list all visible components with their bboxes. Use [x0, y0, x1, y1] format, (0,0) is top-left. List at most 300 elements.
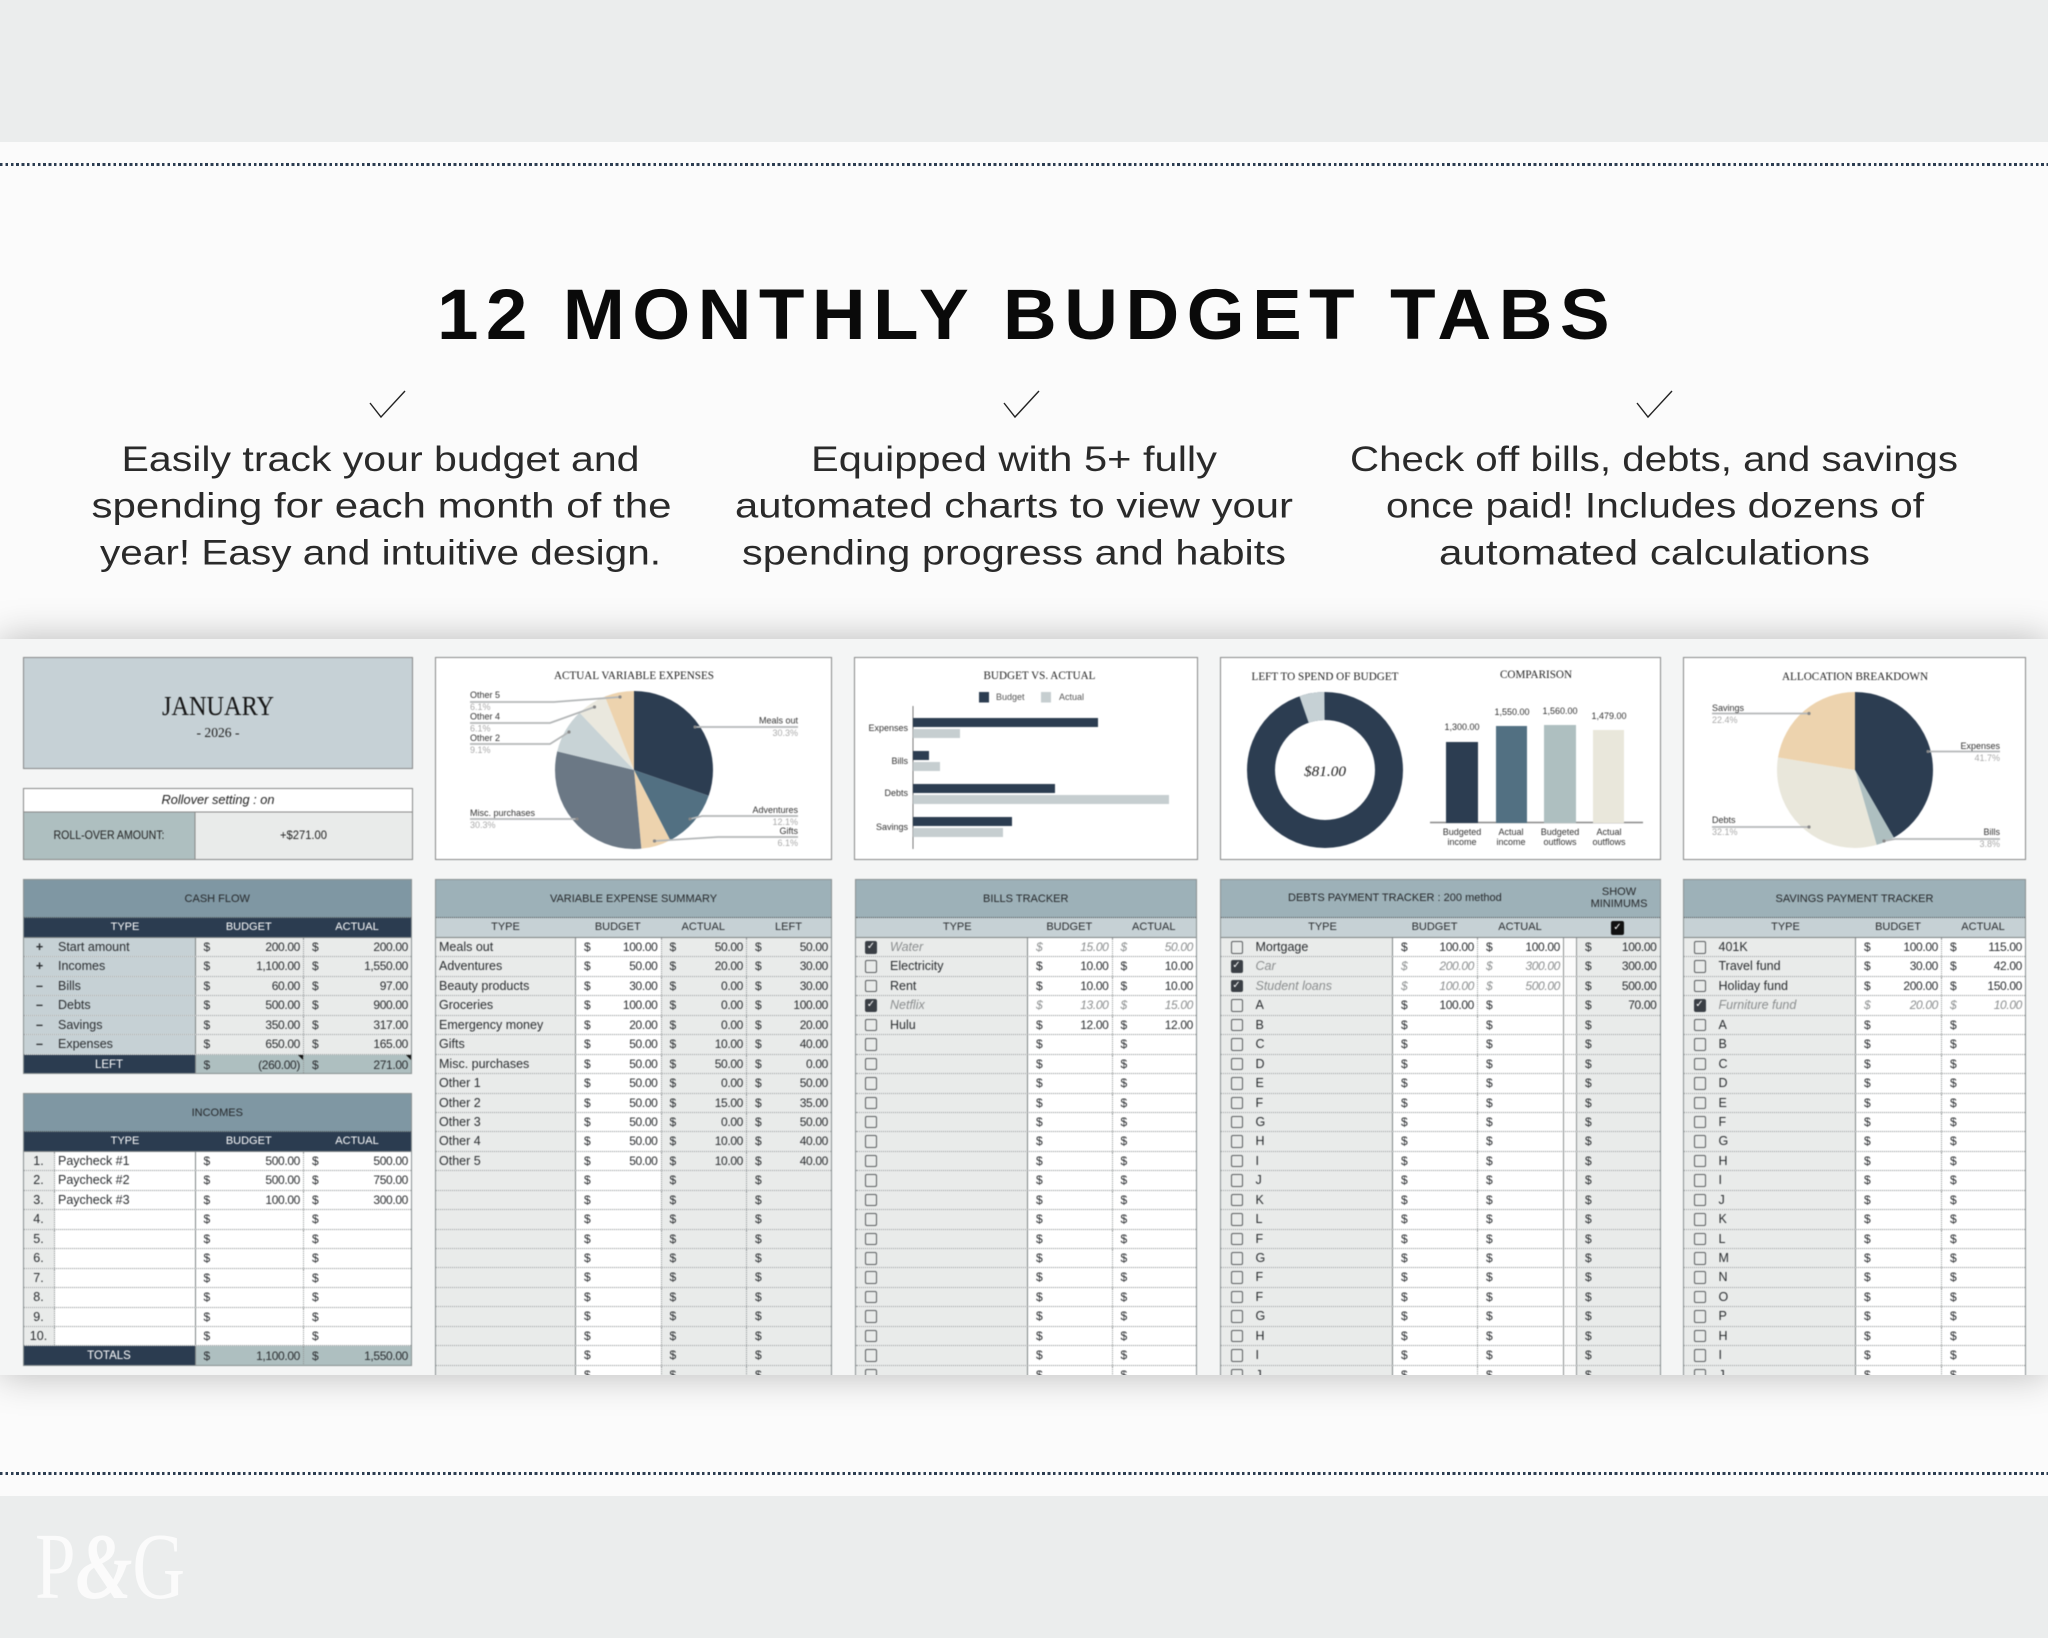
variable expense rows: 100.00	[623, 998, 658, 1012]
variable expense rows: 0.00	[806, 1057, 828, 1071]
incomes rows: $	[312, 1173, 319, 1187]
chart: budget vs actual bars: Debts	[884, 788, 908, 798]
debts rows: 100.00	[1525, 940, 1560, 954]
variable expense rows: $	[755, 1057, 762, 1071]
variable expense rows: $	[755, 1076, 762, 1090]
incomes rows: 2.	[33, 1173, 44, 1187]
variable expense rows: $	[670, 1309, 676, 1323]
debts rows: G	[1256, 1115, 1265, 1129]
debts rows: $	[1486, 1037, 1493, 1051]
cash flow rows: $	[204, 998, 210, 1012]
bills rows: 10.00	[1080, 959, 1108, 973]
debts rows: $	[1401, 1018, 1408, 1032]
savings rows: $	[1864, 1290, 1871, 1304]
savings rows: $	[1950, 1193, 1957, 1207]
variable expense rows: $	[670, 940, 676, 954]
savings rows: N	[1718, 1270, 1728, 1284]
chart: actual variable expenses pie: Adventures	[752, 805, 798, 815]
debts rows: H	[1256, 1329, 1265, 1343]
bills rows: $	[1036, 1329, 1043, 1343]
savings rows: $	[1864, 979, 1871, 993]
chart: left to spend donut and comparison bars: income	[1496, 837, 1526, 847]
savings rows: O	[1718, 1290, 1728, 1304]
savings rows: $	[1950, 1076, 1957, 1090]
variable expense rows: $	[670, 1154, 676, 1168]
variable expense rows: $	[584, 1251, 591, 1265]
savings rows: 30.00	[1910, 959, 1938, 973]
savings rows: $	[1864, 1115, 1871, 1129]
cash flow rows: $	[312, 979, 319, 993]
chart: budget vs actual bars	[853, 656, 1199, 861]
variable expense rows: $	[755, 998, 762, 1012]
bills rows: $	[1120, 1193, 1127, 1207]
variable expense rows: 0.00	[721, 979, 743, 993]
debts rows: $	[1486, 1018, 1493, 1032]
incomes rows: 9.	[33, 1310, 44, 1324]
savings rows: $	[1864, 1154, 1871, 1168]
variable expense rows: 50.00	[629, 1115, 658, 1129]
incomes rows: 500.00	[373, 1154, 408, 1168]
feature 2: check and description: spending progress and habits	[742, 534, 1286, 572]
feature 2: check and description: Equipped with 5+ fully	[811, 440, 1218, 479]
savings column heads: TYPE	[1771, 921, 1800, 933]
debts rows: $	[1401, 1309, 1408, 1323]
variable expense rows: 0.00	[721, 1018, 743, 1032]
chart: left to spend donut and comparison bars: Actual	[1498, 827, 1524, 837]
bills rows: $	[1120, 1134, 1127, 1148]
top band	[0, 0, 2048, 142]
chart: left to spend donut and comparison bars: income	[1447, 837, 1477, 847]
incomes rows: $	[204, 1193, 210, 1207]
cash flow rows: Debts	[58, 998, 91, 1012]
bills rows: ✓	[867, 941, 875, 952]
panel: rollover setting	[22, 787, 414, 861]
table: savings payment tracker	[1683, 879, 2026, 1379]
variable expense rows: $	[755, 1348, 762, 1362]
chart: actual variable expenses pie: Meals out	[759, 716, 798, 726]
variable expense column heads: BUDGET	[595, 921, 641, 933]
debts rows: $	[1585, 1290, 1592, 1304]
debts rows: $	[1585, 998, 1592, 1012]
cash flow rows: –	[36, 979, 43, 993]
bills rows: $	[1036, 1173, 1043, 1187]
variable expense rows: $	[755, 1018, 762, 1032]
bills rows: $	[1036, 1290, 1043, 1304]
variable expense rows: $	[755, 1212, 762, 1226]
bills rows: $	[1120, 940, 1127, 954]
table: bills tracker	[854, 879, 1197, 1379]
variable expense rows: 0.00	[721, 1076, 743, 1090]
savings rows: 150.00	[1987, 979, 2022, 993]
variable expense rows: 50.00	[629, 1076, 658, 1090]
debts rows: $	[1585, 1076, 1592, 1090]
bills rows: $	[1036, 998, 1043, 1012]
bills rows: $	[1120, 1348, 1127, 1362]
debts column heads: BUDGET	[1412, 921, 1457, 933]
variable expense rows: $	[584, 1115, 591, 1129]
debts rows: Car	[1256, 959, 1276, 973]
debts rows: 300.00	[1525, 959, 1560, 973]
debts rows: $	[1585, 1018, 1592, 1032]
debts rows	[1220, 938, 1660, 1375]
savings rows: $	[1864, 998, 1871, 1012]
savings column heads: ACTUAL	[1961, 921, 2005, 933]
bills rows: $	[1120, 998, 1127, 1012]
debts rows: $	[1486, 1173, 1493, 1187]
chart: left to spend donut and comparison bars: LEFT TO SPEND OF BUDGET	[1252, 669, 1399, 683]
variable expense column heads: LEFT	[775, 921, 802, 933]
cash flow rows: $	[204, 940, 210, 954]
cash flow rows: 97.00	[380, 979, 408, 993]
savings rows: $	[1950, 998, 1957, 1012]
chart: allocation breakdown pie: 3.8%	[1979, 839, 2000, 849]
variable expense rows: $	[755, 1096, 762, 1110]
incomes rows: 10.	[30, 1329, 47, 1343]
bills rows: Electricity	[890, 959, 943, 973]
debts rows: $	[1486, 1329, 1493, 1343]
savings rows: K	[1718, 1212, 1727, 1226]
savings header: SAVINGS PAYMENT TRACKER	[1776, 892, 1933, 904]
savings rows: $	[1864, 1251, 1871, 1265]
feature 3: check and description: automated calculations	[1439, 534, 1870, 572]
debts rows: A	[1256, 998, 1264, 1012]
chart: actual variable expenses pie: Misc. purchases	[470, 808, 536, 818]
savings rows: $	[1864, 1232, 1871, 1246]
variable expense rows: $	[584, 998, 591, 1012]
cash flow rows: 650.00	[265, 1037, 300, 1051]
variable expense rows: $	[755, 1173, 762, 1187]
debts rows: 100.00	[1622, 940, 1656, 954]
incomes rows: $	[204, 1310, 210, 1324]
bills rows: $	[1120, 1212, 1127, 1226]
incomes rows: $	[312, 1349, 319, 1363]
variable expense rows: $	[584, 1076, 591, 1090]
debts rows: $	[1486, 1096, 1493, 1110]
bills rows: $	[1120, 959, 1127, 973]
chart: actual variable expenses pie: 6.1%	[470, 702, 491, 712]
incomes rows: $	[312, 1329, 319, 1343]
chart: budget vs actual bars: Actual	[1059, 692, 1084, 702]
cash flow rows: $	[204, 1018, 210, 1032]
bills rows: 10.00	[1165, 979, 1193, 993]
variable expense rows: 40.00	[800, 1037, 828, 1051]
debts rows: $	[1585, 1173, 1592, 1187]
feature 1: check and description	[92, 390, 672, 572]
savings column heads: BUDGET	[1875, 921, 1921, 933]
debts rows: 100.00	[1439, 940, 1474, 954]
debts rows: $	[1486, 1076, 1493, 1090]
variable expense header	[436, 880, 831, 918]
variable expense rows: $	[584, 1018, 591, 1032]
variable expense rows: $	[755, 1309, 762, 1323]
bills rows: $	[1036, 1348, 1043, 1362]
debts rows: $	[1486, 1290, 1493, 1304]
incomes column heads: ACTUAL	[335, 1135, 379, 1147]
debts rows: $	[1401, 1329, 1408, 1343]
incomes rows: $	[204, 1290, 210, 1304]
savings rows: $	[1950, 940, 1957, 954]
variable expense rows: 40.00	[800, 1154, 828, 1168]
variable expense rows: $	[755, 1290, 762, 1304]
variable expense rows: 30.00	[800, 959, 828, 973]
savings rows: 42.00	[1994, 959, 2022, 973]
bills rows: $	[1120, 979, 1127, 993]
cash flow rows: $	[312, 1037, 319, 1051]
incomes rows: $	[204, 1251, 210, 1265]
debts rows: Student loans	[1256, 979, 1332, 993]
cash flow rows: (260.00)	[258, 1058, 300, 1072]
cash flow rows: Expenses	[58, 1037, 113, 1051]
savings rows: Travel fund	[1718, 959, 1781, 973]
variable expense rows: 50.00	[715, 940, 743, 954]
debts rows: F	[1256, 1232, 1263, 1246]
savings rows: $	[1950, 1309, 1957, 1323]
debts rows: $	[1486, 1212, 1493, 1226]
savings rows: $	[1864, 1037, 1871, 1051]
savings rows: M	[1718, 1251, 1729, 1265]
debts rows: $	[1486, 1251, 1493, 1265]
debts rows: $	[1486, 1309, 1493, 1323]
variable expense rows: Other 1	[439, 1076, 481, 1090]
savings rows: $	[1950, 1348, 1957, 1362]
variable expense rows: $	[670, 1270, 676, 1284]
savings rows: $	[1864, 1018, 1871, 1032]
debts rows: $	[1585, 1232, 1592, 1246]
variable expense rows: Beauty products	[439, 979, 529, 993]
cash flow rows: 1,550.00	[364, 959, 408, 973]
variable expense rows: $	[584, 1154, 591, 1168]
savings rows: E	[1718, 1096, 1727, 1110]
bills column heads: TYPE	[943, 921, 972, 933]
chart: left to spend donut and comparison bars: 1,479.00	[1591, 711, 1627, 721]
feature 1: check and description: Easily track your budget and	[122, 440, 640, 479]
savings rows: D	[1718, 1076, 1728, 1090]
savings rows: $	[1864, 1329, 1871, 1343]
debts rows: $	[1486, 1057, 1493, 1071]
incomes header: INCOMES	[192, 1106, 243, 1118]
chart: left to spend donut and comparison bars: Budgeted	[1541, 827, 1579, 837]
savings rows: $	[1950, 1057, 1957, 1071]
incomes column heads: TYPE	[111, 1135, 139, 1147]
chart: allocation breakdown pie: 41.7%	[1974, 753, 2000, 763]
variable expense rows: $	[755, 1251, 762, 1265]
bills rows: $	[1036, 1193, 1043, 1207]
debts rows: $	[1585, 1212, 1592, 1226]
debts column heads: ACTUAL	[1498, 921, 1542, 933]
debts rows: $	[1401, 1154, 1408, 1168]
debts rows: 200.00	[1439, 959, 1474, 973]
savings column heads	[1684, 918, 2025, 938]
chart: allocation breakdown pie: Expenses	[1960, 741, 2000, 751]
incomes rows: $	[204, 1212, 210, 1226]
cash flow rows: Savings	[58, 1018, 102, 1032]
table: variable expense summary	[435, 879, 832, 1379]
bills rows	[856, 938, 1196, 1375]
incomes rows: 750.00	[373, 1173, 408, 1187]
debts column heads	[1221, 918, 1660, 938]
variable expense rows: 35.00	[800, 1096, 828, 1110]
debts rows: $	[1401, 1057, 1408, 1071]
cash flow rows: 165.00	[373, 1037, 408, 1051]
cash flow rows: Incomes	[58, 959, 105, 973]
cash flow rows: Start amount	[58, 940, 130, 954]
debts header	[1221, 880, 1660, 918]
variable expense rows: 50.00	[629, 1154, 658, 1168]
cash flow rows: 350.00	[265, 1018, 300, 1032]
cash flow rows: 200.00	[265, 940, 300, 954]
savings rows: $	[1864, 1057, 1871, 1071]
debts header: DEBTS PAYMENT TRACKER : 200 method	[1288, 892, 1502, 904]
chart: actual variable expenses pie: Gifts	[779, 826, 798, 836]
debts rows: $	[1401, 959, 1408, 973]
chart: allocation breakdown pie: 32.1%	[1712, 827, 1738, 837]
savings rows: F	[1718, 1115, 1726, 1129]
variable expense rows: 50.00	[715, 1057, 743, 1071]
savings rows: 115.00	[1988, 940, 2022, 954]
bills rows: $	[1120, 1173, 1127, 1187]
variable expense rows: $	[584, 979, 591, 993]
debts rows: $	[1585, 959, 1592, 973]
debts rows: K	[1256, 1193, 1264, 1207]
bills rows: $	[1120, 1076, 1127, 1090]
bills rows: 12.00	[1080, 1018, 1108, 1032]
variable expense rows: 10.00	[715, 1154, 743, 1168]
variable expense rows: $	[755, 979, 762, 993]
debts rows: F	[1256, 1096, 1263, 1110]
savings rows: ✓	[1695, 999, 1704, 1010]
table: cash flow	[22, 879, 412, 1074]
bills column heads: BUDGET	[1046, 921, 1092, 933]
variable expense rows: $	[584, 1096, 591, 1110]
chart: actual variable expenses pie: Other 5	[470, 690, 500, 700]
debts rows: 70.00	[1628, 998, 1656, 1012]
bills rows: $	[1036, 1057, 1043, 1071]
variable expense rows: Meals out	[439, 940, 493, 954]
bills rows: $	[1120, 1251, 1127, 1265]
variable expense rows: Other 5	[439, 1154, 481, 1168]
bills rows: $	[1036, 1270, 1043, 1284]
debts rows: $	[1486, 979, 1493, 993]
bills rows: $	[1036, 1134, 1043, 1148]
debts rows: D	[1256, 1057, 1265, 1071]
bills rows: $	[1120, 1309, 1127, 1323]
variable expense rows: $	[584, 959, 591, 973]
debts column heads: ✓	[1613, 922, 1622, 933]
feature 3: check and description: Check off bills, debts, and savings	[1350, 440, 1958, 479]
cash flow rows: $	[204, 979, 210, 993]
variable expense rows: $	[670, 1212, 676, 1226]
variable expense rows: $	[670, 1173, 676, 1187]
variable expense rows: $	[670, 979, 676, 993]
chart: actual variable expenses pie: 30.3%	[772, 728, 798, 738]
savings rows: B	[1718, 1037, 1727, 1051]
savings rows: G	[1718, 1134, 1728, 1148]
debts rows: $	[1585, 1270, 1592, 1284]
cash flow rows: $	[204, 959, 210, 973]
cash flow rows: 200.00	[373, 940, 408, 954]
chart: budget vs actual bars: Expenses	[868, 723, 908, 733]
chart: actual variable expenses pie: 9.1%	[470, 745, 491, 755]
debts rows: 500.00	[1622, 979, 1656, 993]
variable expense rows: Other 3	[439, 1115, 481, 1129]
chart: allocation breakdown pie	[1682, 656, 2027, 861]
chart: budget vs actual bars: Bills	[891, 756, 908, 766]
variable expense rows: 20.00	[715, 959, 743, 973]
bills rows: $	[1036, 1096, 1043, 1110]
variable expense rows: $	[670, 998, 676, 1012]
variable expense rows: 30.00	[800, 979, 828, 993]
variable expense header: VARIABLE EXPENSE SUMMARY	[550, 892, 717, 904]
savings rows: J	[1718, 1193, 1725, 1207]
debts rows: 100.00	[1439, 998, 1474, 1012]
debts rows: F	[1256, 1270, 1263, 1284]
incomes rows: 5.	[33, 1232, 44, 1246]
bills rows: $	[1036, 1251, 1043, 1265]
bills rows: $	[1120, 1057, 1127, 1071]
savings rows: $	[1950, 1018, 1957, 1032]
savings rows: I	[1718, 1348, 1722, 1362]
savings rows: $	[1950, 1270, 1957, 1284]
bottom dotted line	[0, 1472, 2048, 1475]
variable expense rows: $	[670, 959, 676, 973]
variable expense rows: Misc. purchases	[439, 1057, 529, 1071]
savings rows: 401K	[1718, 940, 1748, 954]
variable expense rows: Groceries	[439, 998, 493, 1012]
cash flow rows	[23, 938, 412, 1074]
incomes rows: $	[204, 1154, 210, 1168]
incomes rows: 1,100.00	[256, 1349, 300, 1363]
variable expense rows: $	[584, 1037, 591, 1051]
bills rows: $	[1036, 959, 1043, 973]
savings rows: $	[1864, 1096, 1871, 1110]
variable expense rows: $	[584, 1309, 591, 1323]
variable expense rows: $	[755, 1193, 762, 1207]
variable expense rows: 10.00	[715, 1037, 743, 1051]
cash flow rows: –	[36, 1037, 43, 1051]
variable expense rows: Other 4	[439, 1134, 481, 1148]
bills rows: $	[1036, 1115, 1043, 1129]
debts rows: 100.00	[1439, 979, 1474, 993]
savings rows: P	[1718, 1309, 1727, 1323]
debts rows: $	[1401, 1270, 1408, 1284]
debts rows: I	[1256, 1154, 1259, 1168]
bills rows: $	[1036, 940, 1043, 954]
chart: left to spend donut and comparison bars: 1,300.00	[1444, 722, 1480, 732]
cash flow rows: $	[204, 1058, 210, 1072]
variable expense rows: $	[670, 1329, 676, 1343]
incomes rows: 300.00	[373, 1193, 408, 1207]
panel: rollover setting: ROLL-OVER AMOUNT:	[53, 830, 164, 842]
incomes rows: 8.	[33, 1290, 44, 1304]
variable expense rows: $	[584, 1232, 591, 1246]
variable expense rows: $	[584, 1348, 591, 1362]
variable expense rows: Adventures	[439, 959, 502, 973]
bills rows: Netflix	[890, 998, 925, 1012]
debts rows: $	[1486, 1154, 1493, 1168]
debts rows: $	[1401, 1348, 1408, 1362]
debts rows: $	[1486, 1232, 1493, 1246]
variable expense rows: 50.00	[629, 1037, 658, 1051]
debts rows: G	[1256, 1309, 1265, 1323]
bills rows: $	[1120, 1037, 1127, 1051]
bills rows: $	[1120, 1115, 1127, 1129]
chart: left to spend donut and comparison bars: outflows	[1592, 837, 1626, 847]
chart: actual variable expenses pie: ACTUAL VARIABLE EXPENSES	[554, 668, 714, 682]
variable expense rows: $	[755, 1037, 762, 1051]
variable expense rows: $	[755, 940, 762, 954]
debts rows: ✓	[1232, 960, 1241, 971]
incomes rows: $	[204, 1271, 210, 1285]
